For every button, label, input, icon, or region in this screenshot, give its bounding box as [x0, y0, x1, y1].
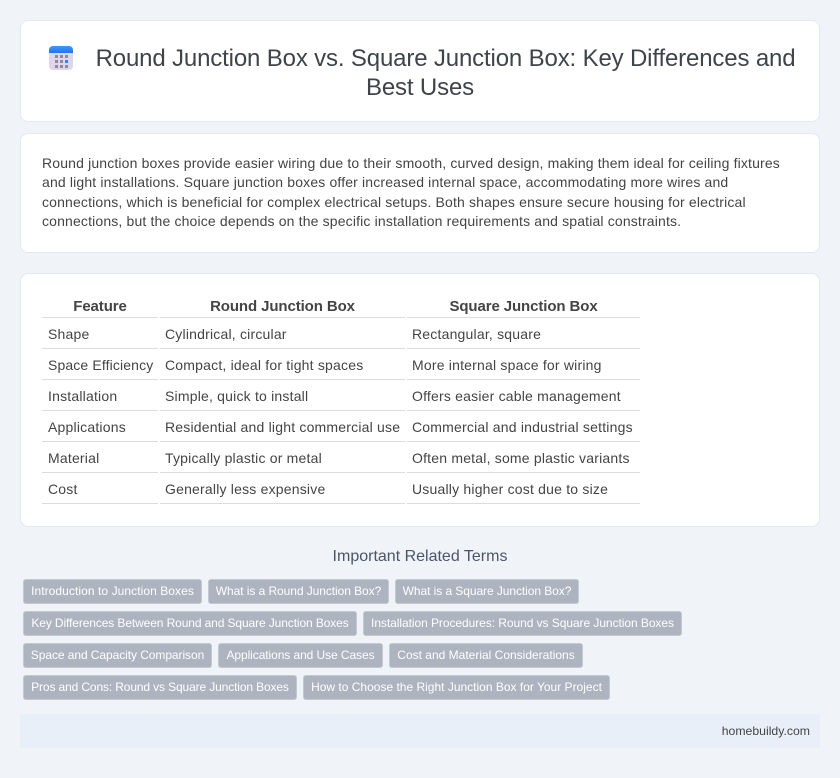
tag: Introduction to Junction Boxes	[31, 584, 194, 598]
table row: Applications	[48, 419, 633, 435]
table row: Installation: Offers easier cable management	[412, 388, 621, 404]
table row: Material: Often metal, some plastic variants	[412, 450, 630, 466]
table header	[73, 298, 598, 315]
tag	[363, 611, 682, 636]
table row: Applications: Residential and light commercial use	[165, 419, 400, 435]
panel: intro text	[20, 133, 820, 253]
panel: comparison table	[20, 273, 820, 527]
table row: Applications: Commercial and industrial settings	[412, 419, 633, 435]
table row: Installation: Simple, quick to install	[165, 388, 308, 404]
text block: intro paragraph: Round junction boxes provide easier wiring due to their smooth, curved design, making them ideal for ceiling fixtures	[42, 155, 780, 171]
text block: intro paragraph: and light installations. Square junction boxes offer increased internal space, accommodating more wires and	[42, 174, 728, 190]
title: Round Junction Box vs. Square Junction Box: Key Differences and	[96, 45, 795, 72]
table row: Space Efficiency: Compact, ideal for tight spaces	[165, 357, 363, 373]
table header: Feature	[73, 298, 127, 315]
table row: Shape: Rectangular, square	[412, 326, 541, 342]
tag	[23, 643, 212, 668]
table row: Material: Typically plastic or metal	[165, 450, 322, 466]
table row: Material	[48, 450, 630, 466]
table row: Material: Material	[48, 450, 99, 466]
table row: Shape: Cylindrical, circular	[165, 326, 287, 342]
tag: Space and Capacity Comparison	[31, 648, 204, 662]
tag	[23, 579, 202, 604]
footer bar	[20, 714, 820, 748]
tag: Key Differences Between Round and Square Junction Boxes	[31, 616, 349, 630]
tag: Installation Procedures: Round vs Square Junction Boxes	[371, 616, 674, 630]
table row: Installation	[48, 388, 621, 404]
tag	[208, 579, 389, 604]
tag: What is a Square Junction Box?	[403, 584, 571, 598]
tag	[23, 611, 357, 636]
table row: Shape: Shape	[48, 326, 89, 342]
table header: Square Junction Box	[449, 298, 598, 315]
tag: How to Choose the Right Junction Box for Your Project	[311, 680, 602, 694]
tag list: related terms	[23, 579, 682, 700]
table row: Cost: Generally less expensive	[165, 481, 325, 497]
panel: title header	[20, 20, 820, 122]
text block: intro paragraph: connections, but the choice depends on the specific installation requirements and spatial constraints.	[42, 213, 681, 229]
icon: calendar grid	[49, 46, 73, 70]
table row: Cost: Usually higher cost due to size	[412, 481, 608, 497]
table header: Round Junction Box	[210, 298, 355, 315]
text block: intro paragraph: connections, which is beneficial for complex electrical setups. Both shapes ensure secure housing for electrical	[42, 194, 746, 210]
table row: Applications: Applications	[48, 419, 126, 435]
tag: What is a Round Junction Box?	[216, 584, 381, 598]
table row: Installation: Installation	[48, 388, 117, 404]
text block: intro paragraph	[42, 155, 780, 229]
tag	[218, 643, 383, 668]
tag	[23, 675, 297, 700]
tag: Applications and Use Cases	[226, 648, 374, 662]
heading: related terms: Important Related Terms	[333, 548, 507, 565]
table row: Space Efficiency: More internal space for wiring	[412, 357, 602, 373]
title: Best Uses	[366, 74, 474, 101]
footer text: homebuildy.com	[722, 724, 810, 738]
table row: Cost: Cost	[48, 481, 78, 497]
table row: Space Efficiency: Space Efficiency	[48, 357, 153, 373]
tag: Cost and Material Considerations	[397, 648, 575, 662]
table row: Shape	[48, 326, 541, 342]
tag	[303, 675, 610, 700]
tag	[389, 643, 583, 668]
tag	[395, 579, 579, 604]
title	[96, 45, 795, 101]
tag: Pros and Cons: Round vs Square Junction Boxes	[31, 680, 289, 694]
table row: Space Efficiency	[48, 357, 602, 373]
table row: Cost	[48, 481, 608, 497]
